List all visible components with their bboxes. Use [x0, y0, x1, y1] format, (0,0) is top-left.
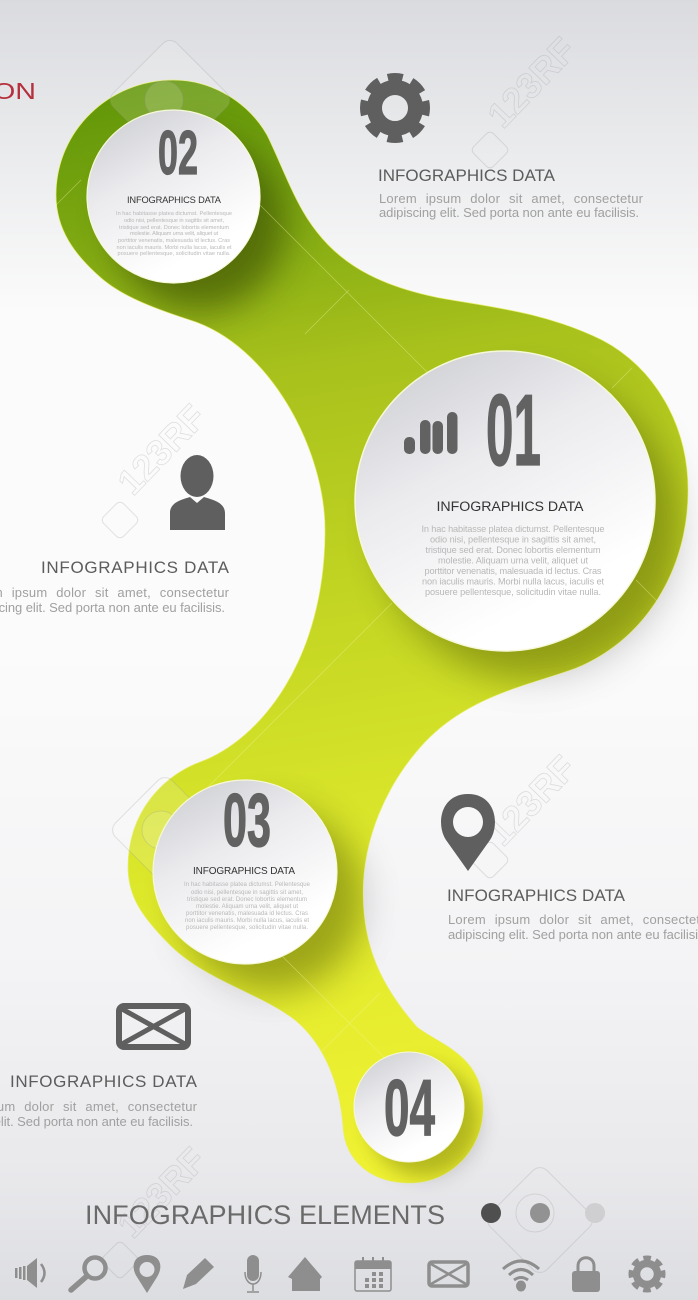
- body text: [0, 585, 230, 615]
- footer dots: [481, 1203, 605, 1223]
- icon: person: [170, 455, 225, 530]
- body text 03: tristique sed erat. Donec lobortis elementum: [187, 897, 307, 903]
- body text 03: non iaculis mauris. Morbi nulla lacus, iaculis et: [185, 918, 309, 924]
- body text 02: tristique sed erat. Donec lobortis elementum: [119, 225, 229, 231]
- body text 01: In hac habitasse platea dictumst. Pellentesque: [422, 524, 604, 534]
- panel: circle 03: [153, 778, 337, 964]
- body text: Lorem ipsum dolor sit amet, consectetur: [379, 191, 644, 206]
- heading: INFOGRAPHICS DATA: [41, 558, 230, 577]
- green connected shape: [56, 80, 698, 1183]
- block: location data: [441, 794, 698, 942]
- number 04: 04: [384, 1063, 435, 1152]
- watermark lettering: [109, 29, 584, 1246]
- block: mail data: [0, 1006, 198, 1129]
- body text 03: molestie. Aliquam urna velit, aliquet ut: [196, 904, 298, 910]
- block: gear data: [365, 78, 644, 220]
- icon: gear: [365, 78, 425, 138]
- icon: envelope small: [429, 1262, 468, 1286]
- body text 03: In hac habitasse platea dictumst. Pellentesque: [184, 882, 311, 888]
- watermark lettering: 123RF: [109, 1139, 214, 1246]
- icon: map pin small: [134, 1255, 160, 1293]
- body text 01: non iaculis mauris. Morbi nulla lacus, iaculis et: [422, 576, 604, 586]
- icon: calendar: [355, 1257, 391, 1291]
- footer icon row: [15, 1255, 663, 1293]
- icon: wifi: [503, 1261, 539, 1292]
- icon: envelope: [119, 1006, 188, 1047]
- number 02: 02: [158, 119, 198, 188]
- body text 02: odio nisi, pellentesque in sagittis sit amet,: [124, 218, 224, 224]
- icon: microphone: [245, 1255, 261, 1292]
- heading 02: INFOGRAPHICS DATA: [127, 195, 222, 205]
- body text: [379, 191, 644, 220]
- icon: gear small: [631, 1258, 663, 1290]
- body text 03: porttitor venenatis, malesuada id lectus. Cras: [186, 911, 308, 917]
- icon: padlock: [572, 1258, 600, 1292]
- panel: circle 04: [354, 1052, 464, 1162]
- watermark lettering: 123RF: [109, 396, 214, 503]
- heading: INFOGRAPHICS DATA: [378, 166, 556, 185]
- panel: circle 01: [355, 351, 655, 651]
- body text 01: porttitor venenatis, malesuada id lectus. Cras: [424, 566, 602, 576]
- number 03: 03: [223, 778, 271, 862]
- body text 01: [422, 524, 604, 597]
- body text 02: posuere pellentesque, solicitudin vitae nulla.: [118, 251, 231, 257]
- panel: circle 02: [87, 110, 260, 283]
- body text 01: posuere pellentesque, solicitudin vitae nulla.: [425, 587, 601, 597]
- footer title: INFOGRAPHICS ELEMENTS: [85, 1200, 445, 1230]
- heading 01: INFOGRAPHICS DATA: [436, 499, 584, 515]
- body text: adipiscing elit. Sed porta non ante eu facilisis.: [379, 205, 639, 220]
- block: person data: [0, 455, 230, 615]
- body text 02: molestie. Aliquam urna velit, aliquet ut: [130, 231, 218, 237]
- heading 03: INFOGRAPHICS DATA: [193, 866, 295, 877]
- body text 03: posuere pellentesque, solicitudin vitae nulla.: [186, 925, 308, 931]
- body text 01: molestie. Aliquam urna velit, aliquet ut: [438, 556, 588, 566]
- body text 01: tristique sed erat. Donec lobortis elementum: [426, 545, 601, 555]
- body text: [448, 912, 698, 942]
- heading: INFOGRAPHICS DATA: [447, 886, 626, 905]
- icon: map pin: [441, 794, 495, 871]
- icon: magnifier: [71, 1258, 106, 1290]
- icon: pencil: [183, 1258, 214, 1289]
- panel: circle 01: 01: [486, 375, 541, 487]
- body text 03: [184, 882, 311, 931]
- icon: speaker: [15, 1258, 44, 1288]
- body text 02: non iaculis mauris. Morbi nulla lacus, iaculis et: [116, 245, 232, 251]
- body text 02: In hac habitasse platea dictumst. Pellentesque: [116, 211, 232, 217]
- faint watermarks: [100, 36, 597, 1280]
- body text 02: porttitor venenatis, malesuada id lectus. Cras: [118, 238, 230, 244]
- body text: [0, 1099, 198, 1129]
- watermark lettering: 123RF: [479, 29, 584, 136]
- watermark lettering: 123RF: [479, 747, 584, 854]
- body text 02: [116, 211, 232, 257]
- body text 01: odio nisi, pellentesque in sagittis sit amet,: [430, 534, 596, 544]
- heading: INFOGRAPHICS DATA: [10, 1072, 198, 1091]
- soft shadows behind green shape: [180, 378, 680, 1177]
- body text 03: odio nisi, pellentesque in sagittis sit amet,: [191, 890, 303, 896]
- icon: signal bars: [404, 412, 458, 454]
- icon: home: [288, 1257, 322, 1291]
